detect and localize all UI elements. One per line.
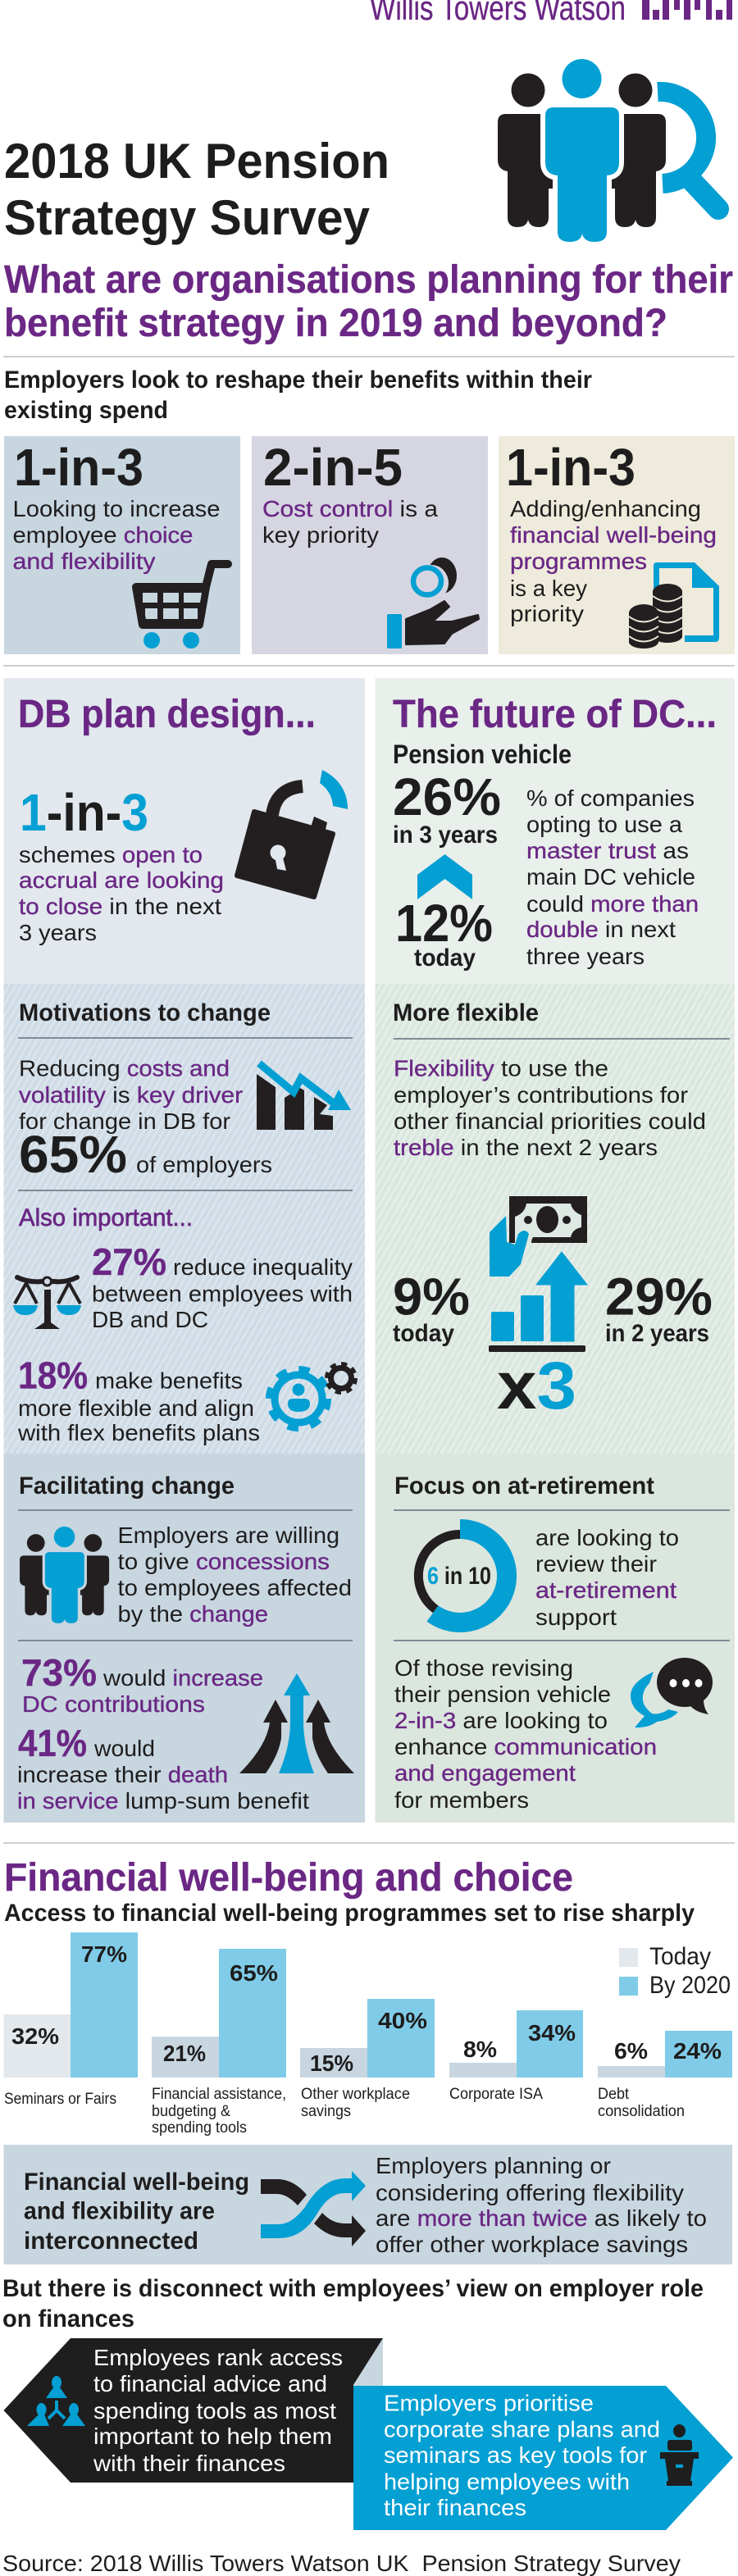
bars: debt consolidation: consolidation — [598, 2103, 685, 2120]
section: facilitating change: in service lump-sum benefit — [17, 1788, 309, 1814]
section: more flexible: in 2 years — [605, 1320, 709, 1347]
panel: DB plan design — [2, 678, 735, 2576]
icon: document and coin stacks — [629, 562, 719, 649]
bars: corporate ISA: 34% — [528, 2020, 576, 2046]
section: pension vehicle: opting to use a — [526, 812, 682, 837]
subtitle question: benefit strategy in 2019 and beyond? — [4, 302, 667, 345]
heading: the future of DC: The future of DC... — [393, 693, 717, 736]
section: more flexible: employer’s contributions for — [394, 1082, 688, 1108]
icon: up chevron — [417, 854, 472, 899]
heading: employers reshape — [4, 366, 592, 424]
bars: other workplace savings: savings — [301, 2103, 351, 2120]
legend: By 2020 — [649, 1972, 731, 1999]
section: pension vehicle: master trust as — [526, 838, 689, 863]
stat: 18% — [17, 1354, 260, 1445]
bars: financial assistance: spending tools — [152, 2119, 247, 2137]
panel: interconnected callout: Employers planning or — [376, 2153, 611, 2178]
section: focus on at-retirement: Of those revising — [394, 1655, 573, 1681]
chart: 6 in 10 donut — [418, 1529, 507, 1623]
bar chart: programmes today vs by 2020 — [3, 1932, 732, 2137]
panel: the future of DC — [2, 678, 735, 2576]
bars: debt consolidation — [598, 2031, 732, 2120]
bars: seminars or fairs: Seminars or Fairs — [4, 2091, 116, 2108]
section: focus on at-retirement — [394, 1472, 730, 1813]
heading: disconnect with employees — [2, 2275, 704, 2333]
panel: 1-in-3 choice and flexibility — [4, 436, 240, 654]
section: pension vehicle: three years — [526, 944, 645, 969]
stat: 1-in-3 schemes: accrual are looking — [19, 867, 224, 893]
arrow panel: employees: with their finances — [93, 2451, 285, 2476]
section: facilitating change: Employers are willing — [118, 1522, 339, 1548]
section: facilitating change: 73% — [21, 1651, 97, 1694]
section: motivations to change — [13, 999, 355, 1814]
icon: shopping cart — [135, 564, 228, 649]
bars: financial assistance: 21% — [163, 2041, 206, 2066]
section: focus on at-retirement: support — [535, 1604, 617, 1630]
section: motivations to change: for change in DB for — [19, 1108, 230, 1134]
section: facilitating change: Facilitating change — [19, 1472, 235, 1500]
section: facilitating change: DC contributions — [22, 1691, 205, 1717]
arrow panel: employers — [353, 2386, 733, 2530]
panel: 2-in-5 cost control — [252, 436, 488, 654]
section: more flexible: today — [393, 1320, 454, 1347]
heading: financial well-being and choice: Financial well-being and choice — [4, 1856, 573, 1900]
section: focus on at-retirement: 2-in-3 are looking to — [394, 1708, 608, 1733]
arrow panel: employees: to financial advice and — [93, 2371, 327, 2396]
icon: hand with coins — [387, 558, 479, 649]
section: pension vehicle: % of companies — [526, 785, 695, 811]
section: more flexible: 29% — [605, 1268, 713, 1327]
stat: 27%: 27% — [92, 1240, 166, 1283]
bars: other workplace savings: 40% — [378, 2008, 427, 2033]
section: motivations to change: Motivations to change — [19, 999, 271, 1026]
panel: 1-in-3 choice and flexibility: and flexibility — [13, 548, 156, 574]
panel: interconnected callout: Financial well-being — [24, 2169, 249, 2196]
heading: employers reshape: Employers look to reshape their benefits within their — [4, 366, 592, 394]
panel: 2-in-5 cost control: Cost control is a — [262, 496, 438, 521]
section: facilitating change: to employees affected — [118, 1575, 352, 1600]
icon: speech bubbles — [631, 1658, 713, 1727]
stat: 18%: more flexible and align — [18, 1395, 254, 1421]
bars: other workplace savings: Other workplace — [301, 2086, 410, 2103]
arrow panel: employers: helping employees with — [384, 2469, 630, 2495]
heading: disconnect with employees: But there is disconnect with employees’ view on employer role — [2, 2275, 704, 2302]
icon: hand with banknote and rising bars — [489, 1196, 587, 1352]
section: pension vehicle: today — [414, 944, 476, 972]
panel: 1-in-3 choice and flexibility: employee choice — [13, 522, 194, 548]
section: motivations to change: 65% — [19, 1125, 127, 1184]
section: more flexible — [393, 999, 730, 1423]
section: pension vehicle: could more than — [526, 891, 699, 917]
heading: employers reshape: existing spend — [4, 397, 168, 424]
stat: 18%: 18% — [18, 1354, 88, 1397]
stat: 27%: reduce inequality — [173, 1254, 353, 1280]
chart: 6 in 10 donut: 6 in 10 — [427, 1563, 491, 1590]
arrow panel: employees: spending tools as most — [93, 2398, 336, 2424]
stat: 1-in-3 schemes — [19, 783, 224, 945]
panel: 1-in-3 financial well-being: is a key — [510, 576, 587, 601]
panel: interconnected callout — [3, 2145, 732, 2264]
icon: connected people — [27, 2376, 85, 2426]
source note: Source: 2018 Willis Towers Watson UK Pension Strategy Survey — [2, 2551, 681, 2576]
heading: DB plan design: DB plan design... — [18, 693, 316, 736]
section: focus on at-retirement: their pension vehicle — [394, 1682, 611, 1707]
icon: crossing arrows — [261, 2171, 366, 2246]
icon: merging arrows — [239, 1673, 354, 1773]
heading: disconnect with employees: on finances — [2, 2305, 134, 2333]
stat: 18%: make benefits — [95, 1368, 243, 1394]
title: Strategy Survey — [4, 190, 371, 245]
panel: 2-in-5 cost control: 2-in-5 — [263, 438, 403, 497]
section: focus on at-retirement: at-retirement — [535, 1577, 676, 1603]
stat: 1-in-3 schemes: schemes open to — [19, 842, 203, 867]
panel: 1-in-3 financial well-being: 1-in-3 — [506, 438, 636, 497]
panel: 1-in-3 financial well-being: priority — [510, 601, 584, 626]
panel: 1-in-3 financial well-being: financial well-being — [510, 522, 717, 548]
section: more flexible: 9% — [393, 1268, 470, 1327]
stat: 1-in-3 schemes: to close in the next — [19, 894, 221, 919]
bars: corporate ISA — [449, 2010, 583, 2103]
section: facilitating change: to give concessions — [118, 1549, 330, 1574]
icon: falling bar chart — [257, 1063, 351, 1130]
section: focus on at-retirement: for members — [394, 1787, 529, 1813]
section: pension vehicle: main DC vehicle — [526, 864, 695, 890]
section: more flexible: Flexibility to use the — [394, 1056, 608, 1081]
icon: balance scales — [13, 1277, 81, 1329]
section: pension vehicle: Pension vehicle — [393, 740, 572, 769]
arrow panel: employers: Employers prioritise — [384, 2391, 594, 2415]
section: more flexible: treble in the next 2 years — [394, 1135, 658, 1160]
icon: open padlock — [237, 770, 348, 897]
section: facilitating change: by the change — [118, 1601, 268, 1627]
bars: seminars or fairs: 77% — [81, 1941, 127, 1967]
panel: interconnected callout: are more than twice as likely to — [376, 2205, 707, 2231]
section: facilitating change — [17, 1472, 354, 1814]
section: focus on at-retirement: enhance communication — [394, 1734, 657, 1759]
subtitle question — [4, 258, 733, 345]
section: facilitating change: increase their death — [17, 1762, 228, 1787]
arrow panel: employers: their finances — [384, 2495, 526, 2520]
section: pension vehicle: 26% — [393, 767, 501, 826]
bars: debt consolidation: 6% — [614, 2038, 648, 2064]
panel: interconnected callout: and flexibility are — [24, 2197, 215, 2225]
icon: group of people — [20, 1527, 109, 1623]
arrow panel: employers: corporate share plans and — [384, 2417, 660, 2442]
panel: 1-in-3 choice and flexibility: Looking to increase — [13, 496, 220, 521]
panel: 2-in-5 cost control: key priority — [262, 522, 379, 548]
panel: 1-in-3 financial well-being — [499, 436, 735, 654]
bars: financial assistance: budgeting & — [152, 2103, 230, 2120]
section: motivations to change: Also important... — [19, 1204, 193, 1231]
section: facilitating change: 41% — [18, 1722, 87, 1764]
icon: speaker at podium — [660, 2424, 699, 2486]
bars: corporate ISA: 8% — [463, 2037, 497, 2062]
bars: other workplace savings: 15% — [310, 2050, 353, 2076]
section: focus on at-retirement: review their — [535, 1551, 657, 1577]
arrow panel: employees: Employees rank access — [93, 2345, 343, 2370]
section: motivations to change: Reducing costs and — [19, 1056, 230, 1081]
stat: 27%: DB and DC — [92, 1307, 208, 1332]
panel: 1-in-3 financial well-being: Adding/enhancing — [510, 496, 701, 521]
legend: Today — [649, 1943, 711, 1970]
section: pension vehicle — [393, 740, 699, 972]
heading: access to programmes: Access to financial well-being programmes set to rise sharply — [4, 1900, 695, 1927]
section: focus on at-retirement: and engagement — [394, 1760, 576, 1786]
section: pension vehicle: 12% — [395, 894, 493, 953]
bars: financial assistance: Financial assistance, — [152, 2086, 286, 2103]
stat: 27%: between employees with — [92, 1281, 353, 1307]
section: more flexible: other financial priorities could — [394, 1108, 706, 1134]
bars: other workplace savings — [300, 1999, 435, 2120]
panel: interconnected callout: offer other workplace savings — [376, 2232, 688, 2257]
stat: x3: x3 — [497, 1349, 576, 1423]
panel: interconnected callout: considering offering flexibility — [376, 2180, 684, 2205]
bars: financial assistance: 65% — [230, 1960, 278, 1986]
bars: seminars or fairs — [3, 1932, 138, 2108]
bars: seminars or fairs: 32% — [11, 2023, 59, 2049]
arrow panel: employers: seminars as key tools for — [384, 2442, 647, 2468]
section: focus on at-retirement: are looking to — [535, 1525, 679, 1550]
panel: interconnected callout: interconnected — [24, 2228, 198, 2255]
section: facilitating change: would — [93, 1736, 155, 1761]
stat: 27% — [92, 1240, 353, 1332]
section: pension vehicle: in 3 years — [393, 821, 498, 849]
title: 2018 UK Pension — [4, 134, 390, 189]
bars: debt consolidation: Debt — [598, 2086, 630, 2103]
bars: financial assistance — [152, 1949, 286, 2137]
section: motivations to change: of employers — [136, 1152, 272, 1177]
icon: people with magnifying glass — [498, 59, 718, 242]
section: facilitating change: would increase — [102, 1665, 263, 1691]
section: more flexible: More flexible — [393, 999, 539, 1026]
bars: debt consolidation: 24% — [673, 2038, 722, 2064]
stat: 1-in-3 schemes: 3 years — [19, 920, 97, 945]
panel: 1-in-3 choice and flexibility: 1-in-3 — [14, 438, 144, 497]
panel: 1-in-3 financial well-being: programmes — [510, 548, 647, 574]
arrow panel: employees — [3, 2338, 383, 2483]
stat: 1-in-3 schemes: 1-in-3 — [20, 783, 148, 842]
stat: 18%: with flex benefits plans — [17, 1420, 260, 1445]
section: pension vehicle: double in next — [526, 917, 676, 942]
bars: corporate ISA: Corporate ISA — [449, 2086, 543, 2103]
section: focus on at-retirement: Focus on at-retirement — [394, 1472, 654, 1500]
section: motivations to change: volatility is key driver — [19, 1082, 243, 1108]
arrow panel: employees: important to help them — [93, 2424, 332, 2449]
icon: gears with person — [270, 1364, 355, 1427]
title — [4, 134, 390, 245]
legend — [619, 1943, 731, 1999]
